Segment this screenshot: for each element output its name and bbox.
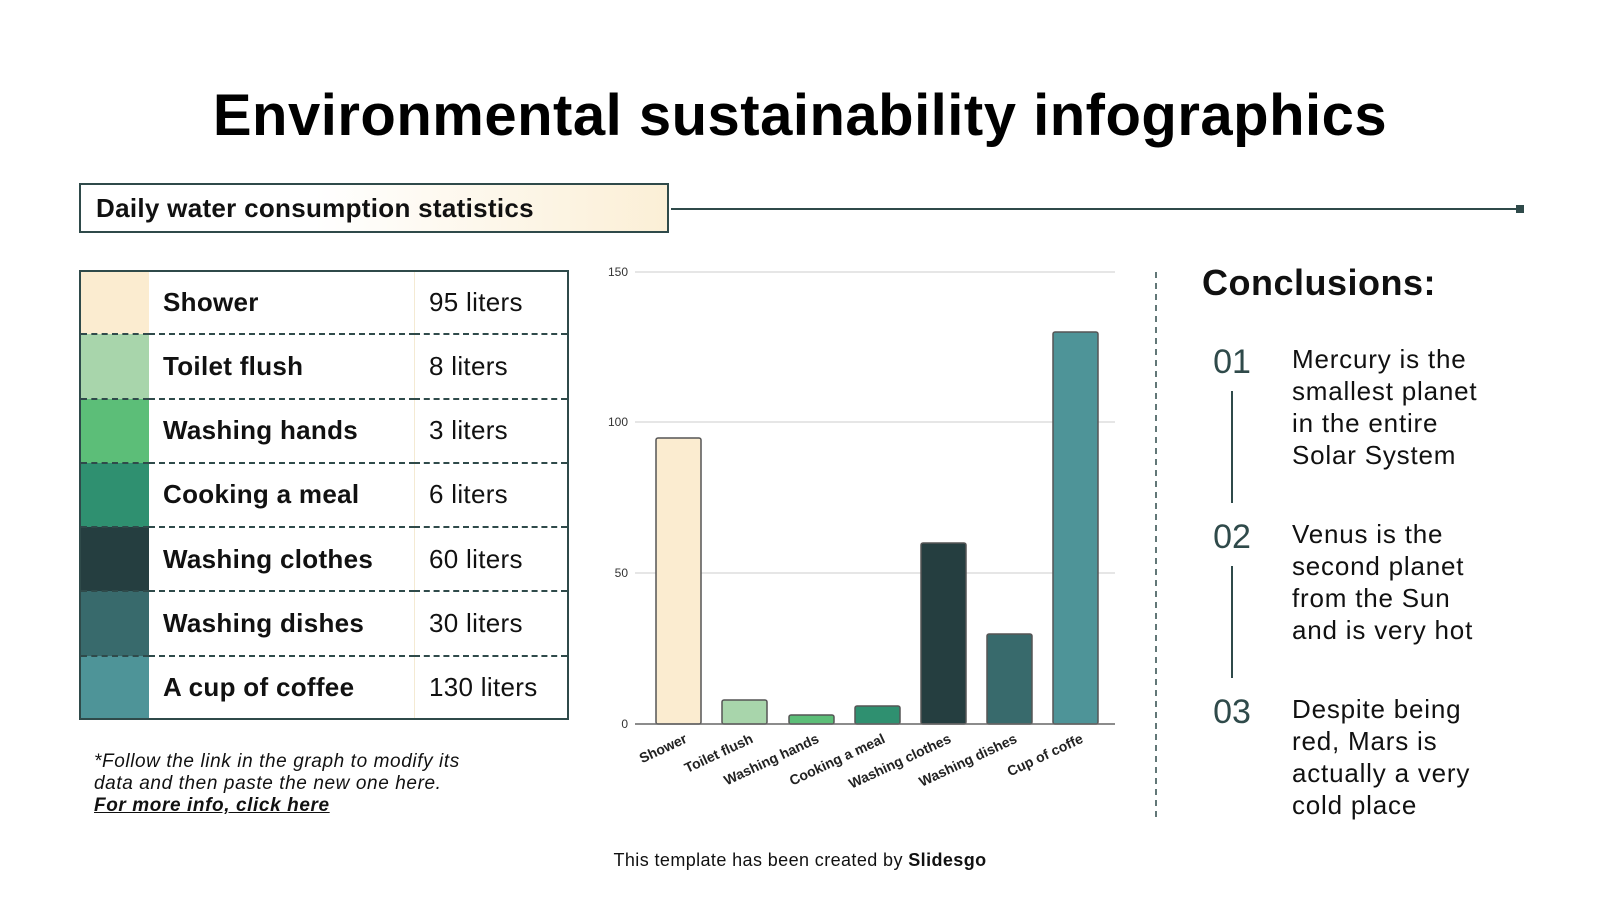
conclusion 01: smallest planet [1292, 376, 1477, 406]
bar chart: Toilet flush [682, 730, 755, 776]
conclusion 03: 03 [1213, 693, 1251, 731]
table: Washing clothes [163, 544, 373, 574]
header box [79, 183, 669, 233]
note text: For more info, click here [94, 795, 330, 816]
bar chart: Shower [637, 730, 690, 766]
conclusion 03 [1213, 693, 1470, 820]
footer: This template has been created by Slidesgo [614, 850, 986, 870]
conclusion 02: and is very hot [1292, 615, 1473, 645]
table: 95 liters [429, 287, 523, 317]
bar chart: Cooking a meal [787, 730, 887, 788]
table: A cup of coffee [163, 672, 354, 702]
bar chart: 50 [615, 566, 628, 580]
bar chart: Washing dishes [916, 730, 1019, 790]
conclusion 01: in the entire [1292, 408, 1438, 438]
table: Washing hands [163, 415, 358, 445]
conclusion 03: cold place [1292, 790, 1417, 820]
table: 60 liters [429, 544, 523, 574]
table: Cooking a meal [163, 479, 359, 509]
table: 3 liters [429, 415, 508, 445]
note text: *Follow the link in the graph to modify its [94, 751, 460, 772]
table: Washing dishes [163, 608, 364, 638]
bar chart: Washing hands [721, 730, 821, 788]
bar chart: 150 [608, 265, 628, 279]
conclusion 02: second planet [1292, 551, 1464, 581]
conclusion 01: Mercury is the [1292, 344, 1466, 374]
note text: data and then paste the new one here. [94, 773, 442, 794]
bar chart: Washing clothes [846, 730, 953, 792]
table [79, 270, 569, 720]
conclusion 02: 02 [1213, 518, 1251, 556]
table: 30 liters [429, 608, 523, 638]
title: Environmental sustainability infographics [213, 83, 1387, 148]
table: 130 liters [429, 672, 538, 702]
table: 6 liters [429, 479, 508, 509]
bar chart: Cup of coffe [1005, 730, 1085, 779]
conclusion 03: actually a very [1292, 758, 1470, 788]
conclusion 02: Venus is the [1292, 519, 1443, 549]
conclusion 02 [1213, 518, 1473, 678]
conclusion 03: Despite being [1292, 694, 1461, 724]
conclusion 01: 01 [1213, 343, 1251, 381]
conclusion 03: red, Mars is [1292, 726, 1437, 756]
table: Shower [163, 287, 259, 317]
conclusion 01: Solar System [1292, 440, 1456, 470]
bar chart: 100 [608, 415, 628, 429]
table: 8 liters [429, 351, 508, 381]
header line [671, 208, 1517, 210]
conclusion 02: from the Sun [1292, 583, 1450, 613]
conclusions heading: Conclusions: [1202, 262, 1436, 303]
note text [94, 751, 460, 816]
conclusion 01 [1213, 343, 1477, 503]
table: Toilet flush [163, 351, 303, 381]
bar chart: 0 [621, 717, 628, 731]
header box: Daily water consumption statistics [96, 193, 534, 223]
